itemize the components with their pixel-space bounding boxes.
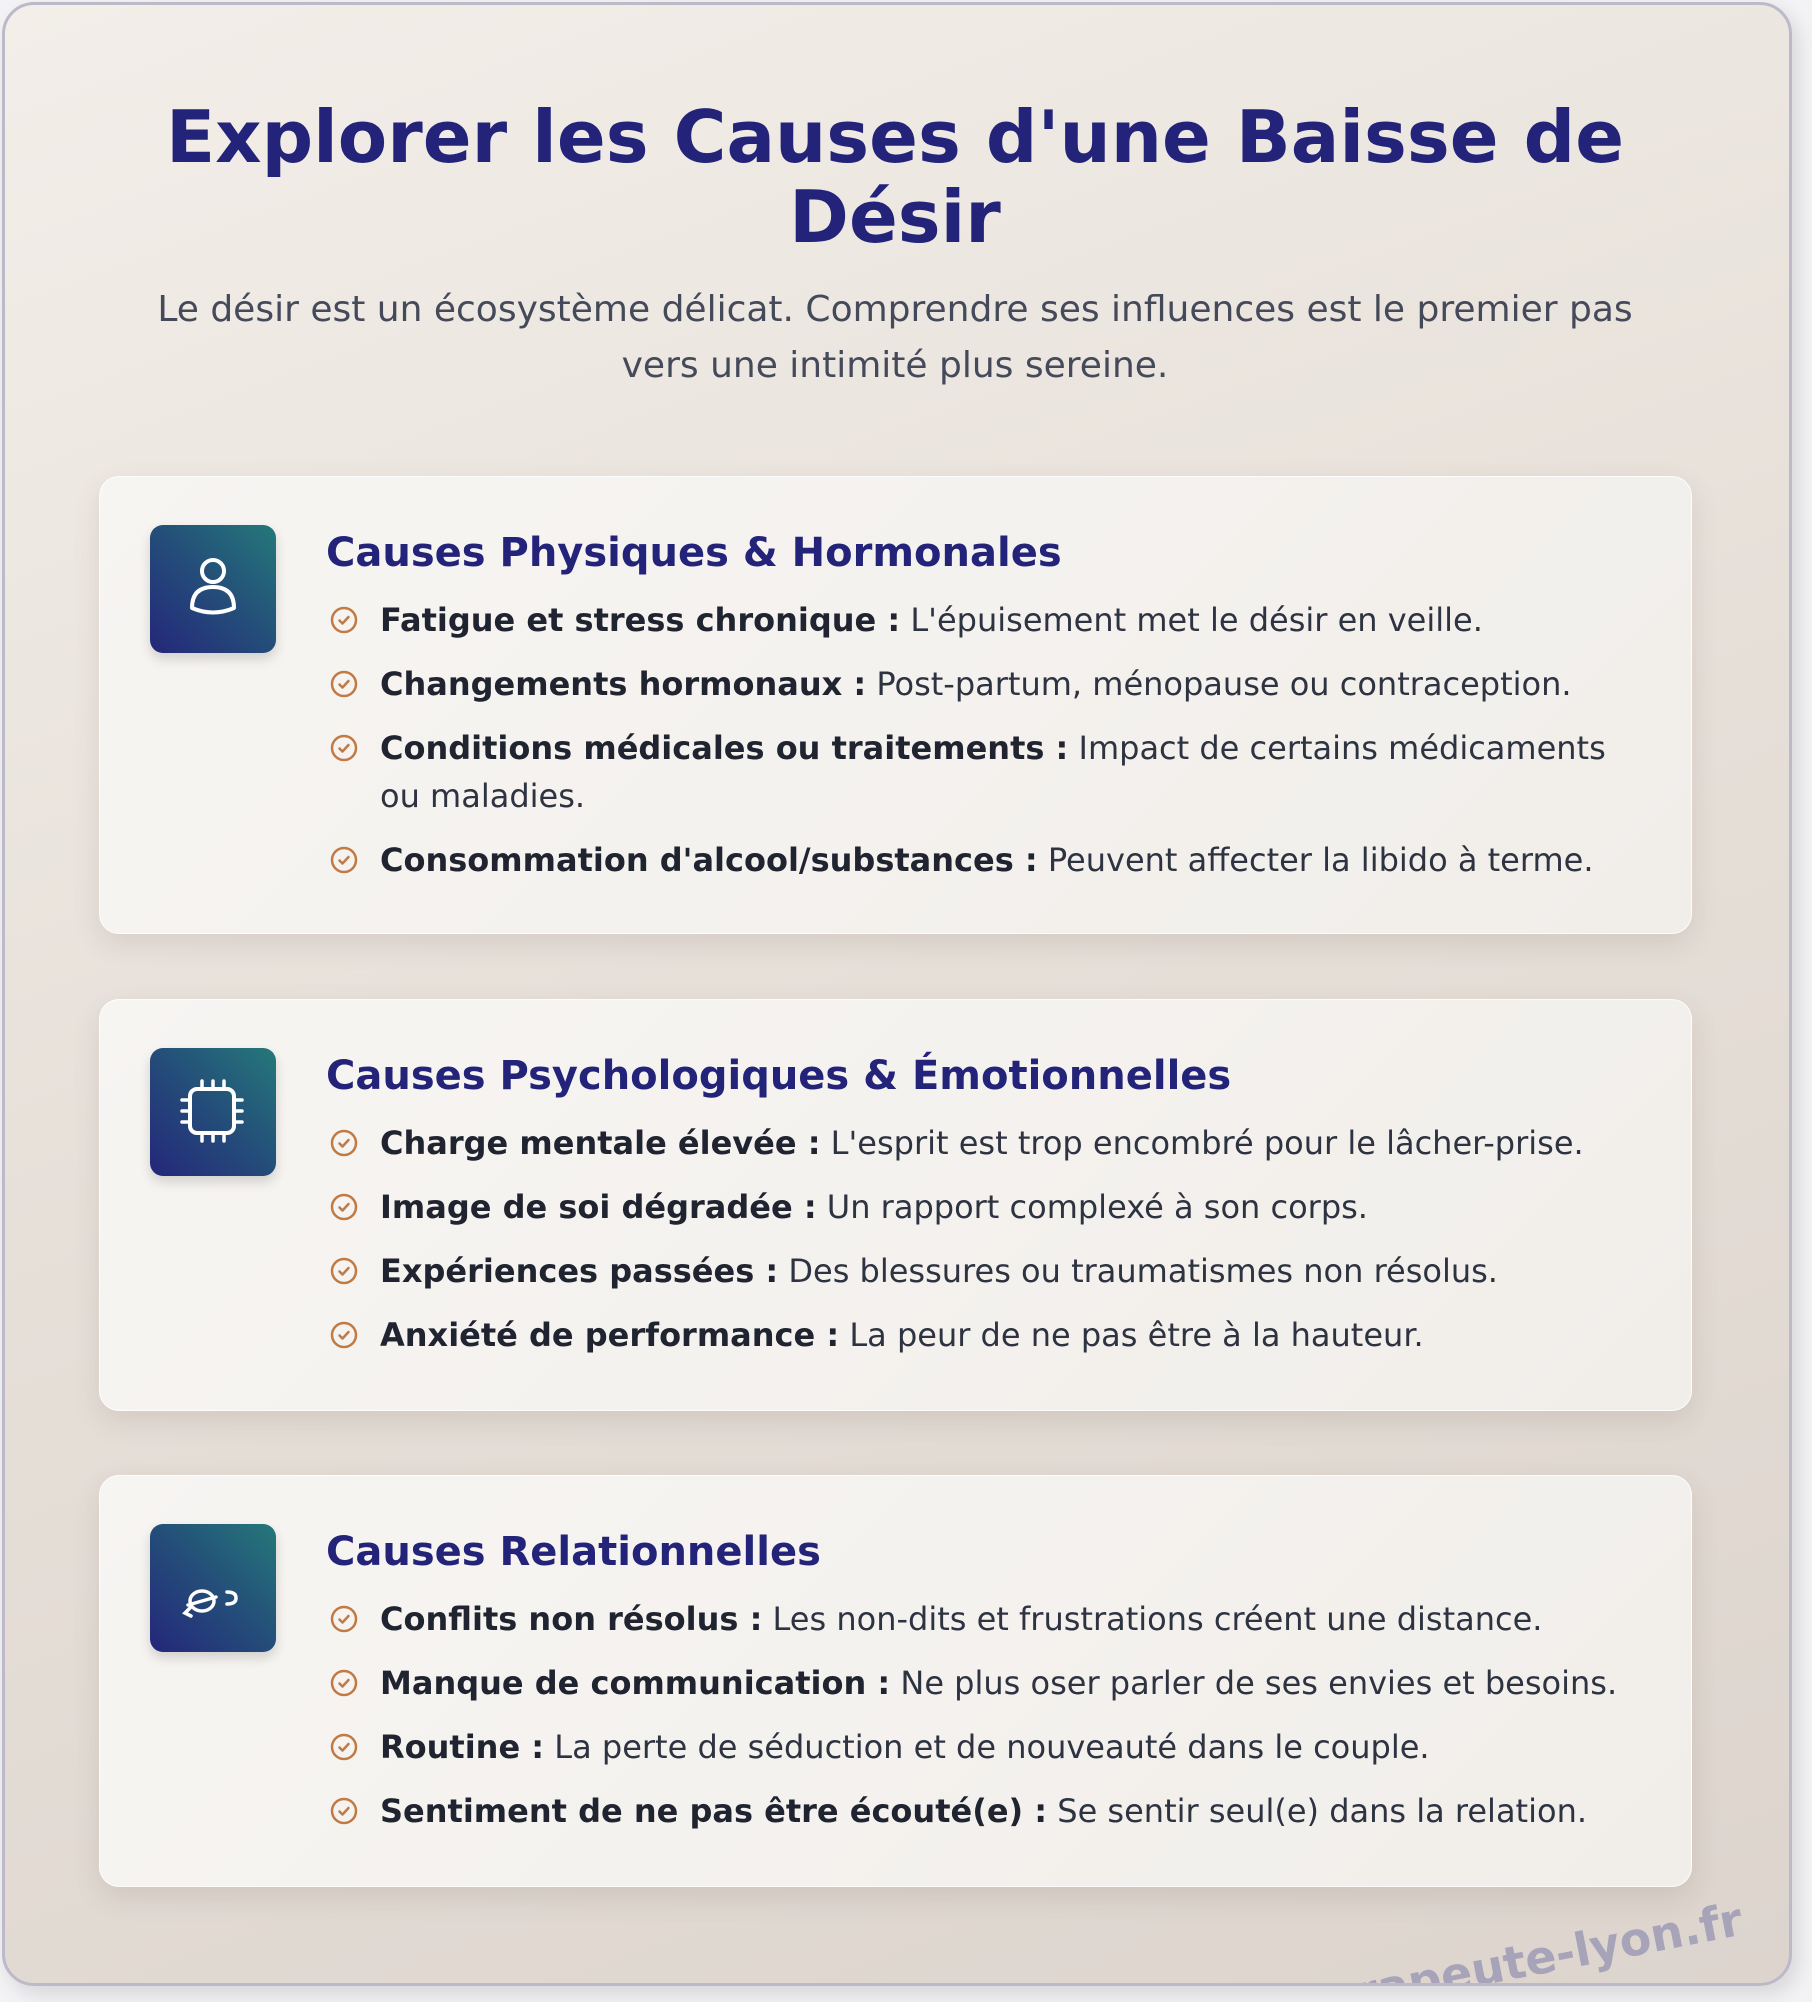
text block: relational causes (326, 1529, 1617, 1830)
icon: person (150, 525, 276, 653)
list item: Manque de communication : Ne plus oser parler de ses envies et besoins. (380, 1664, 1617, 1702)
heading: Causes Psychologiques & Émotionnelles (326, 1053, 1231, 1099)
subtitle: Le désir est un écosystème délicat. Comprendre ses influences est le premier pas vers une intimité plus sereine. (157, 289, 1633, 386)
list item: Expériences passées : Des blessures ou traumatismes non résolus. (380, 1252, 1498, 1290)
title: Explorer les Causes d'une Baisse de Désir (166, 95, 1624, 259)
list item: Image de soi dégradée : Un rapport complexé à son corps. (380, 1188, 1368, 1226)
heading: Causes Relationnelles (326, 1529, 821, 1575)
text block: psychological causes (326, 1052, 1584, 1354)
list item: Fatigue et stress chronique : L'épuisement met le désir en veille. (380, 601, 1483, 639)
list item: Consommation d'alcool/substances : Peuvent affecter la libido à terme. (380, 841, 1593, 879)
list item: Sentiment de ne pas être écouté(e) : Se sentir seul(e) dans la relation. (380, 1792, 1587, 1830)
list item: Anxiété de performance : La peur de ne pas être à la hauteur. (380, 1316, 1424, 1354)
icon: relation (150, 1524, 276, 1652)
text block: physical causes (326, 530, 1606, 879)
list item: Conditions médicales ou traitements : Impact de certains médicaments ou maladies. (380, 729, 1606, 815)
panel: psychological causes (99, 999, 1692, 1411)
list item: Conflits non résolus : Les non-dits et frustrations créent une distance. (380, 1600, 1542, 1638)
list item: Changements hormonaux : Post-partum, ménopause ou contraception. (380, 665, 1572, 703)
heading: Causes Physiques & Hormonales (326, 530, 1062, 576)
panel: relational causes (99, 1475, 1692, 1887)
panel: physical causes (99, 476, 1692, 934)
icon: chip (150, 1048, 276, 1176)
list item: Routine : La perte de séduction et de nouveauté dans le couple. (380, 1728, 1430, 1766)
list item: Charge mentale élevée : L'esprit est trop encombré pour le lâcher-prise. (380, 1124, 1584, 1162)
